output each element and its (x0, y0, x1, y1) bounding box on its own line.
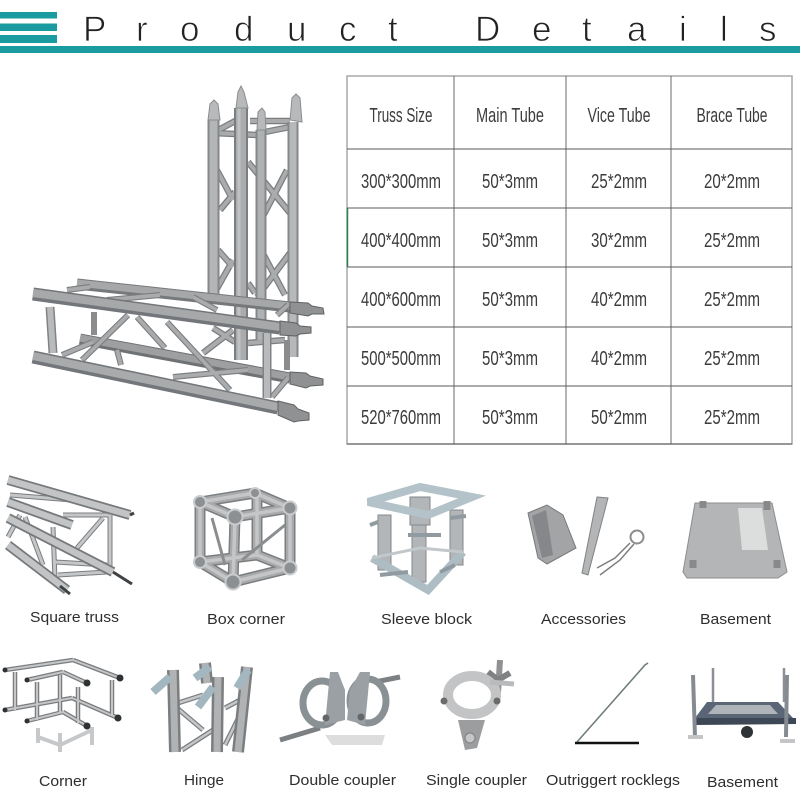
vertical truss (203, 86, 302, 360)
title: ProductDetails (83, 10, 776, 49)
table grid (347, 76, 792, 444)
table row 400*400mm: 30*2mm (591, 230, 647, 252)
table header: Truss Size (370, 105, 432, 127)
horizontal truss (33, 283, 324, 422)
table row 300*300mm: 25*2mm (591, 171, 647, 193)
main truss photo (33, 86, 324, 422)
label: basement frame: Basement (707, 775, 778, 791)
table row 520*760mm: 520*760mm (361, 407, 441, 429)
table row 300*300mm: 50*3mm (482, 171, 538, 193)
table row 520*760mm: 25*2mm (704, 407, 760, 429)
table row 300*300mm: 20*2mm (704, 171, 760, 193)
icon: box corner (194, 488, 296, 590)
table header (370, 105, 768, 127)
label: square truss: Square truss (30, 610, 119, 626)
label: box corner: Box corner (207, 612, 285, 628)
table row 400*600mm: 400*600mm (361, 289, 441, 311)
table row 300*300mm (361, 171, 760, 193)
table header: Main Tube (476, 105, 544, 127)
table row 500*500mm: 25*2mm (704, 348, 760, 370)
label: single coupler: Single coupler (426, 773, 527, 789)
label: hinge: Hinge (184, 773, 224, 789)
table row 400*600mm: 40*2mm (591, 289, 647, 311)
icon: hinge (153, 663, 248, 752)
icon: sleeve block (368, 487, 472, 590)
table header: Brace Tube (696, 105, 768, 127)
table row 500*500mm (361, 348, 760, 370)
table row 500*500mm: 50*3mm (482, 348, 538, 370)
icon: basement plate (683, 501, 787, 578)
label: outrigger rocklegs: Outriggert rocklegs (546, 773, 680, 789)
label: sleeve block: Sleeve block (381, 612, 473, 628)
table header: Vice Tube (588, 105, 650, 127)
icon: single coupler (440, 660, 514, 750)
label: double coupler: Double coupler (289, 773, 396, 789)
header rule (0, 46, 800, 53)
table row 520*760mm: 50*2mm (591, 407, 647, 429)
table row 520*760mm: 50*3mm (482, 407, 538, 429)
table row 400*400mm: 25*2mm (704, 230, 760, 252)
icon: double coupler (280, 672, 400, 745)
table row 400*600mm: 50*3mm (482, 289, 538, 311)
header stripes icon (0, 12, 57, 43)
label: basement: Basement (700, 612, 771, 628)
table row 500*500mm: 40*2mm (591, 348, 647, 370)
spec table (347, 76, 792, 444)
icon: corner (2, 660, 124, 752)
table row 400*600mm (361, 289, 760, 311)
table row 520*760mm (361, 407, 760, 429)
icon: square truss (8, 480, 134, 594)
label: accessories: Accessories (541, 612, 626, 628)
label: corner: Corner (39, 774, 87, 790)
table row 400*400mm: 400*400mm (361, 230, 441, 252)
table row 400*400mm (361, 230, 760, 252)
icon: accessories (528, 497, 644, 575)
icon: basement frame (688, 668, 796, 741)
table row 500*500mm: 500*500mm (361, 348, 441, 370)
icon: outrigger (575, 663, 648, 743)
table row 400*400mm: 50*3mm (482, 230, 538, 252)
table row 400*600mm: 25*2mm (704, 289, 760, 311)
table row 300*300mm: 300*300mm (361, 171, 441, 193)
